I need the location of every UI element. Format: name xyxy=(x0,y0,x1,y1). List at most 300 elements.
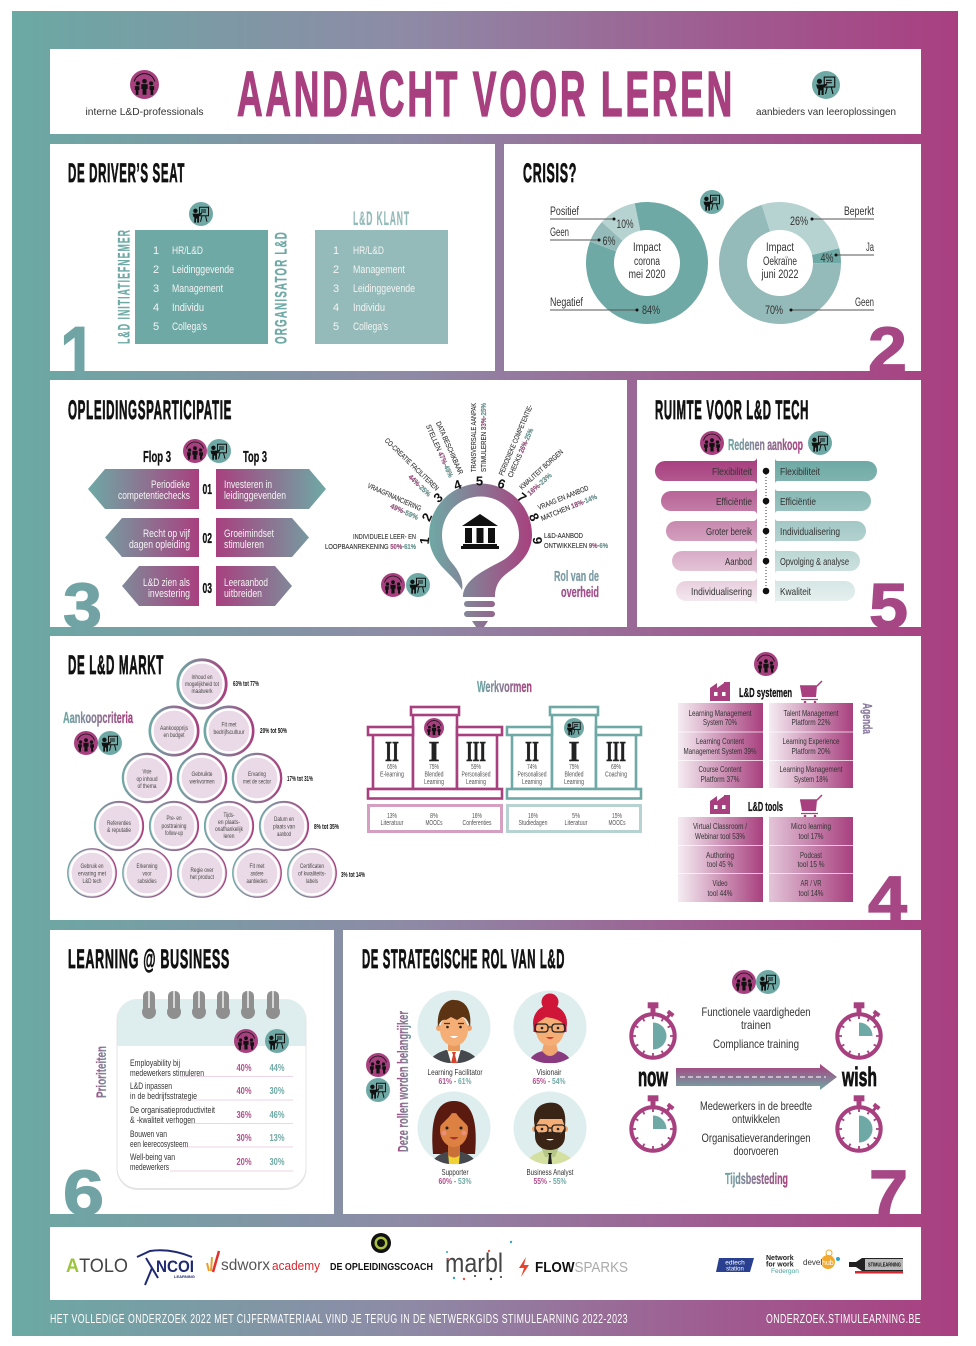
top arrows: Leeraanbod xyxy=(224,577,268,589)
icon: professionals xyxy=(366,1053,390,1077)
time text upper: trainen xyxy=(741,1018,771,1032)
circle labels xyxy=(78,674,326,885)
priority percentages: 30% xyxy=(236,1133,252,1144)
bulb ray labels: CHECKS 26%-25% xyxy=(506,426,536,479)
flop arrows: L&D zien als xyxy=(143,577,190,589)
flop arrows: dagen opleiding xyxy=(129,539,190,551)
label top 3: Top 3 xyxy=(243,449,267,466)
icon: professionals xyxy=(183,439,207,463)
circle labels: Referenties xyxy=(107,820,131,827)
circle labels: Tijds- xyxy=(224,812,234,819)
calendar xyxy=(116,990,306,1190)
podium: professionals: 13% xyxy=(387,813,397,820)
donut: corona: 10% xyxy=(616,219,634,231)
top arrows: Investeren in xyxy=(224,479,272,491)
donut labels and leader lines: Beperkt xyxy=(844,206,875,218)
podium: providers: III xyxy=(606,736,626,768)
bar labels: Flexibiliteit xyxy=(780,466,820,478)
flop arrows: competentiechecks xyxy=(118,490,190,502)
donut: corona: 6% xyxy=(602,236,616,248)
circle labels: aanbod xyxy=(277,831,291,838)
tools boxes: tool 44% xyxy=(708,888,733,898)
rotated label prioriteiten: Prioriteiten xyxy=(93,1046,109,1098)
circle labels: Inhoud en xyxy=(192,674,213,681)
list box initiator: HR/L&D xyxy=(172,245,203,257)
donut: corona: Impact xyxy=(633,242,662,254)
icon: providers xyxy=(808,431,832,455)
stopwatch: now bottom xyxy=(631,1095,675,1151)
podium: professionals: 8% xyxy=(430,813,438,820)
donut: Ukraine: 70% xyxy=(765,305,783,317)
rank numbers: 02 xyxy=(202,530,212,547)
podium: professionals: MOOCs xyxy=(426,820,443,827)
bar labels: Kwaliteit xyxy=(780,586,811,598)
circle labels: ervaring met xyxy=(78,870,106,878)
time text lower: doorvoeren xyxy=(734,1144,778,1158)
logo develhub xyxy=(803,1250,840,1269)
circle labels: of kwaliteits- xyxy=(298,870,326,878)
rank numbers xyxy=(202,481,212,597)
range labels xyxy=(233,679,365,879)
bulb ray labels: VRAAGFINANCIERING xyxy=(366,481,423,513)
circle labels: en plaats- xyxy=(218,819,240,826)
icon: providers xyxy=(406,573,430,597)
bulb ray labels: ONTWIKKELEN 9%-6% xyxy=(544,541,609,550)
timeline dots xyxy=(763,468,769,594)
donut labels and leader lines: Ja xyxy=(866,242,874,254)
circle labels: of thema xyxy=(138,783,157,790)
numeral 1: 1 xyxy=(60,310,96,398)
systems boxes: Platform 37% xyxy=(700,774,740,784)
list box client: Management xyxy=(353,264,405,276)
circle labels: & reputatie xyxy=(107,827,131,834)
podium: providers xyxy=(507,707,641,832)
white gap rings xyxy=(70,662,334,894)
donut: corona xyxy=(586,202,708,324)
list box client: 4 xyxy=(333,302,339,314)
logo sdworx academy: academy xyxy=(272,1258,320,1273)
icon: professionals xyxy=(754,652,778,676)
range labels: 17% tot 31% xyxy=(287,774,313,783)
rotated label roles: Deze rollen worden belangrijker xyxy=(395,1011,412,1152)
priority percentages xyxy=(236,1063,285,1168)
podium: providers: Learning xyxy=(564,779,584,786)
left bars xyxy=(655,458,757,604)
list box client: 3 xyxy=(333,283,339,295)
label L&D tools: L&D tools xyxy=(748,799,783,814)
label now: now xyxy=(638,1062,669,1092)
circle labels: Datum en xyxy=(274,816,294,823)
bar labels: Aanbod xyxy=(725,556,752,568)
circle labels: Visie xyxy=(142,768,152,776)
tools boxes: Video xyxy=(712,878,728,888)
icon: providers xyxy=(700,190,724,214)
logo network for work: Federgon xyxy=(771,1268,799,1275)
circle labels: Gebruikte xyxy=(192,771,213,778)
donut: corona: 84% xyxy=(642,305,660,317)
range labels: 20% tot 50% xyxy=(260,726,287,735)
tools boxes: tool 45 % xyxy=(707,859,733,869)
panel 1: driver's seat: DE DRIVER’S SEAT xyxy=(68,158,185,188)
top arrows: uitbreiden xyxy=(224,588,262,600)
icon: professionals xyxy=(381,573,405,597)
panel 1: driver's seat: L&D KLANT xyxy=(353,209,410,230)
label L&D systemen: L&D systemen xyxy=(739,685,792,700)
podium: professionals xyxy=(368,707,502,832)
bulb ray labels: STELLEN 47%-49% xyxy=(424,423,456,479)
podium: providers: Coaching xyxy=(605,772,627,778)
bulb ray labels xyxy=(325,402,609,551)
icon: providers xyxy=(189,202,213,226)
subheading werkvormen: Werkvormen xyxy=(477,679,532,696)
footer left text: HET VOLLEDIGE ONDERZOEK 2022 MET CIJFERMATERIAAL VIND JE TERUG IN DE NETWERKGIDS STIMULEARNING 2022-2023 xyxy=(50,1312,628,1326)
icon: providers xyxy=(207,439,231,463)
bulb ray labels: TRANSVERSALE AANPAK xyxy=(469,403,478,472)
light bulb xyxy=(429,484,532,627)
list box initiator: 2 xyxy=(153,264,159,276)
icon: providers xyxy=(366,1078,390,1102)
priority percentages: 13% xyxy=(270,1133,285,1144)
circle labels: en budget xyxy=(164,732,185,739)
role captions: 65% - 54% xyxy=(532,1076,566,1086)
circle labels: labels xyxy=(306,878,318,885)
priority rows: in de bedrijfsstrategie xyxy=(130,1091,197,1101)
podium: providers: Personalised xyxy=(518,772,547,778)
donut: Ukraine: Oekraïne xyxy=(763,256,797,268)
tools boxes: tool 14% xyxy=(798,888,824,898)
bar labels: Efficiëntie xyxy=(716,496,752,508)
podium: providers: 75% xyxy=(569,764,579,771)
panel 6: learning at business: LEARNING @ BUSINESS xyxy=(68,944,230,974)
rank numbers: 03 xyxy=(202,580,212,597)
bulb ray labels: 44%-25% xyxy=(406,473,433,499)
stopwatch: wish bottom xyxy=(837,1095,881,1151)
circle labels: Fit met xyxy=(250,863,265,870)
tools boxes: Webinar tool 53% xyxy=(695,831,745,841)
role captions: Learning Facilitator xyxy=(428,1067,483,1077)
bar labels: Individualisering xyxy=(691,586,752,598)
panel 4: de L&D markt xyxy=(50,636,921,935)
podium: professionals: Blended xyxy=(424,772,444,778)
donut labels and leader lines: Positief xyxy=(550,206,580,218)
label flop 3: Flop 3 xyxy=(143,449,171,466)
circle labels: L&D tech xyxy=(82,878,102,885)
bulb ray numbers: 3 xyxy=(431,489,446,506)
logo edtech station xyxy=(716,1258,754,1272)
criteria pyramid circles xyxy=(68,660,336,897)
donut labels and leader lines: Geen xyxy=(550,227,569,239)
priority rows: & -kwaliteit verhogen xyxy=(130,1115,195,1125)
podium: providers: 16% xyxy=(528,813,538,820)
label rol van de overheid: Rol van de xyxy=(554,568,599,585)
priority percentages: 36% xyxy=(236,1110,252,1121)
list box initiator: Leidinggevende xyxy=(172,264,234,276)
bulb ray numbers: 4 xyxy=(451,476,464,493)
logo atolo: ATOLO xyxy=(66,1256,128,1277)
label tijdsbesteding: Tijdsbesteding xyxy=(725,1171,788,1188)
circle labels: andere xyxy=(250,870,264,878)
systems boxes: Learning Content xyxy=(696,736,744,746)
panel 6: learning at business xyxy=(50,930,334,1229)
panel 7: strategische rol: DE STRATEGISCHE ROL VAN L&D xyxy=(362,944,565,974)
circle labels: Aankoopprijs xyxy=(160,725,188,732)
avatar: supporter xyxy=(418,1092,490,1164)
logo ncoi: NCOI xyxy=(156,1257,194,1276)
bulb ray labels: L&D-AANBOD xyxy=(544,531,583,540)
role captions: Business Analyst xyxy=(526,1167,574,1177)
podium: professionals: III xyxy=(466,736,486,768)
tools boxes: Virtual Classroom / xyxy=(693,821,747,831)
logo develhub: hub xyxy=(822,1260,834,1267)
logo ncoi xyxy=(137,1250,195,1285)
time text lower: Organisatieveranderingen xyxy=(702,1131,810,1145)
bulb ray numbers: 9 xyxy=(530,536,545,545)
label rol van de overheid: overheid xyxy=(561,584,599,601)
donut labels and leader lines: Geen xyxy=(855,297,874,309)
time text upper xyxy=(702,1005,810,1051)
panel 4: de L&D markt: DE L&D MARKT xyxy=(68,650,164,680)
tools boxes xyxy=(678,817,853,902)
circle labels: aanbieders xyxy=(246,878,268,885)
panel 7: strategische rol xyxy=(343,930,921,1229)
logo ncoi: LEARNING xyxy=(174,1274,195,1279)
donut: Ukraine: 4% xyxy=(820,253,834,265)
panel 3: opleidingsparticipatie xyxy=(50,380,627,642)
circle labels: werkvormen xyxy=(189,778,215,786)
tools boxes: Authoring xyxy=(706,850,734,860)
icon: professionals xyxy=(700,431,724,455)
circle labels: mogelijkheid tot xyxy=(185,681,219,688)
panel 2: crisis: CRISIS? xyxy=(523,158,577,188)
flop arrows: Periodieke xyxy=(151,479,190,491)
list box client: HR/L&D xyxy=(353,245,384,257)
rotated label organiser: ORGANISATOR L&D xyxy=(272,231,290,344)
icon: cart tools xyxy=(800,795,822,817)
donut labels and leader lines xyxy=(550,206,875,312)
numeral 7: 7 xyxy=(869,1157,908,1229)
time text lower: Medewerkers in de breedte xyxy=(700,1099,812,1113)
bulb ray labels: 16%-23% xyxy=(525,470,554,497)
icon: factory systems xyxy=(710,682,730,701)
logo develhub: devel xyxy=(803,1258,822,1267)
circle labels: bedrijfscultuur xyxy=(214,729,245,736)
bar labels: Opvolging & analyse xyxy=(780,556,849,568)
header label left: interne L&D-professionals xyxy=(86,106,204,118)
priority rows: medewerkers xyxy=(130,1162,169,1172)
rotated label initiator: L&D INITIATIEFNEMER xyxy=(114,229,134,344)
podium: providers: 15% xyxy=(612,813,622,820)
bulb ray labels: STIMULEREN 33%-25% xyxy=(479,402,488,472)
logo edtech station: edtech xyxy=(725,1260,745,1266)
list box initiator: Collega’s xyxy=(172,321,207,333)
bar labels: Efficiëntie xyxy=(780,496,816,508)
bulb ray numbers: 6 xyxy=(496,475,508,492)
flop arrows xyxy=(88,469,199,606)
priority percentages: 30% xyxy=(270,1157,285,1168)
bulb ray numbers: 2 xyxy=(419,511,435,524)
logo marbl: marbl xyxy=(445,1248,503,1278)
podium: professionals: 59% xyxy=(471,764,481,771)
podium: providers: 5% xyxy=(572,813,580,820)
podium: providers: 69% xyxy=(611,764,621,771)
priority divider lines xyxy=(170,1076,293,1171)
priority rows: De organisatieproductiviteit xyxy=(130,1105,215,1115)
rotated label agenda: Agenda xyxy=(860,703,875,735)
priority rows: Well-being van xyxy=(130,1152,175,1162)
tools boxes: tool 17% xyxy=(798,831,824,841)
podium: providers: II xyxy=(525,736,539,768)
priority percentages: 40% xyxy=(236,1063,252,1074)
top arrows xyxy=(216,469,326,606)
circle labels: follow-up xyxy=(165,830,183,837)
bulb ray numbers: 5 xyxy=(476,474,483,488)
subheading aankoopcriteria: Aankoopcriteria xyxy=(63,710,133,727)
panel 3: opleidingsparticipatie: OPLEIDINGSPARTICIPATIE xyxy=(68,395,232,425)
numeral 2: 2 xyxy=(868,314,907,386)
top arrows: Groeimindset xyxy=(224,528,274,540)
list box client: Individu xyxy=(353,302,385,314)
podium: professionals: Learning xyxy=(466,779,486,786)
list box initiator: 4 xyxy=(153,302,159,314)
circle labels: op inhoud xyxy=(136,776,158,783)
role captions: Visionair xyxy=(536,1067,562,1077)
label rol van de overheid xyxy=(554,568,599,601)
avatar: learning facilitator xyxy=(418,990,490,1064)
list box initiator: Individu xyxy=(172,302,204,314)
priority percentages: 46% xyxy=(270,1110,285,1121)
systems boxes: System 18% xyxy=(794,774,828,784)
podium: professionals: Literatuur xyxy=(380,820,404,827)
bar labels: Individualisering xyxy=(780,526,840,538)
circle labels: subsidies xyxy=(138,878,157,885)
role captions: 55% - 55% xyxy=(534,1176,567,1186)
stopwatch: now top xyxy=(631,1002,675,1058)
donut: Ukraine: 26% xyxy=(790,216,808,228)
bulb ray labels: LOOPBAANREKENING 50%-61% xyxy=(325,542,416,551)
list box initiator: 1 xyxy=(153,245,159,257)
range labels: 3% tot 14% xyxy=(341,870,365,879)
logo de opleidingscoach xyxy=(330,1233,433,1273)
bulb ray numbers: 8 xyxy=(526,511,542,524)
circle labels: Pre- en xyxy=(166,815,182,822)
numeral 4: 4 xyxy=(868,863,907,935)
systems boxes: System 70% xyxy=(703,717,737,727)
icon: L&D professionals xyxy=(130,70,159,99)
circle labels: leren xyxy=(224,833,235,840)
circle labels: Erkenning xyxy=(136,863,158,870)
logo network for work xyxy=(766,1255,799,1275)
bulb ray labels: DATA BESCHIKBAAR xyxy=(434,420,465,476)
logo sdworx academy: sdworx xyxy=(221,1257,270,1274)
icon: factory tools xyxy=(710,795,730,814)
circle labels: Ervaring xyxy=(248,771,266,778)
list box initiator: Management xyxy=(172,283,223,295)
flop arrows: investering xyxy=(148,588,190,600)
donut: Ukraine xyxy=(719,202,841,324)
systems boxes: Talent Management xyxy=(784,708,839,718)
icon: professionals xyxy=(234,1029,258,1053)
panel 1: driver's seat xyxy=(50,144,495,398)
circle labels: onafhankelijk xyxy=(215,826,243,833)
logo flowsparks xyxy=(519,1257,628,1277)
rank numbers: 01 xyxy=(202,481,212,498)
list box client: Collega’s xyxy=(353,321,388,333)
priority rows: medewerkers stimuleren xyxy=(130,1068,204,1078)
logo flowsparks: FLOWSPARKS xyxy=(535,1259,628,1276)
circle labels: Gebruik en xyxy=(80,863,104,870)
bulb ray labels: MATCHEN 18%-14% xyxy=(539,492,599,523)
logo sdworx academy xyxy=(207,1251,320,1274)
icon: providers xyxy=(812,71,840,99)
bulb ray labels: KWALITEIT BORGEN xyxy=(517,447,565,491)
time text upper: Functionele vaardigheden xyxy=(702,1005,810,1019)
circle labels: met de sector xyxy=(243,778,271,786)
podium: providers: MOOCs xyxy=(608,820,626,827)
role captions: 61% - 61% xyxy=(438,1076,472,1086)
systems boxes: Course Content xyxy=(698,764,742,774)
panel 5: ruimte voor L&D tech xyxy=(637,380,921,642)
systems boxes xyxy=(678,703,853,788)
stopwatch: wish top xyxy=(837,1002,881,1058)
bulb ray labels: 49%-59% xyxy=(389,501,420,522)
top arrows: stimuleren xyxy=(224,539,264,551)
tools boxes: tool 15 % xyxy=(798,859,825,869)
role captions: Supporter xyxy=(442,1167,469,1177)
right bars xyxy=(775,458,877,604)
podium: professionals: I xyxy=(428,736,440,768)
time text lower xyxy=(700,1099,812,1158)
circle labels: plaats van xyxy=(273,824,295,830)
podium: providers: I xyxy=(568,736,580,768)
podium: professionals: Personalised xyxy=(462,772,491,778)
header panel xyxy=(50,49,921,134)
icon: providers xyxy=(265,1029,289,1053)
donut: Ukraine: Impact xyxy=(766,242,795,254)
logo edtech station: station xyxy=(726,1266,744,1272)
arrow xyxy=(676,1064,837,1090)
logo stimulearning xyxy=(849,1258,903,1274)
bulb ray numbers: 7 xyxy=(514,489,529,506)
header label right: aanbieders van leeroplossingen xyxy=(756,106,896,118)
range labels: 63% tot 77% xyxy=(233,679,259,688)
circle labels: voor xyxy=(142,870,152,878)
podium: providers: Studiedagen xyxy=(518,820,548,827)
priority percentages: 30% xyxy=(270,1086,285,1097)
list box initiator: 5 xyxy=(153,321,159,333)
role captions xyxy=(428,1067,574,1186)
icon: government building xyxy=(461,514,499,549)
icon: professionals xyxy=(74,731,98,755)
priority rows: een leerecosysteem xyxy=(130,1139,188,1149)
icon: providers xyxy=(756,970,780,994)
circle labels: maatwerk xyxy=(192,688,213,695)
bulb ray numbers: 1 xyxy=(417,536,432,545)
tools boxes: Podcast xyxy=(800,850,822,860)
podium: professionals: II xyxy=(385,736,399,768)
logo network for work: for work xyxy=(766,1262,794,1268)
priority percentages: 40% xyxy=(236,1086,252,1097)
systems boxes: Management System 39% xyxy=(684,746,757,756)
podium: providers: Blended xyxy=(564,772,584,778)
podium: professionals: 16% xyxy=(472,813,482,820)
systems boxes: Learning Management xyxy=(688,708,752,718)
priority percentages: 44% xyxy=(270,1063,285,1074)
list box client: 2 xyxy=(333,264,339,276)
role captions: 60% - 53% xyxy=(438,1176,472,1186)
label wish: wish xyxy=(841,1062,877,1092)
logo network for work: Network xyxy=(766,1255,794,1262)
priority rows: Employability bij xyxy=(130,1058,180,1068)
